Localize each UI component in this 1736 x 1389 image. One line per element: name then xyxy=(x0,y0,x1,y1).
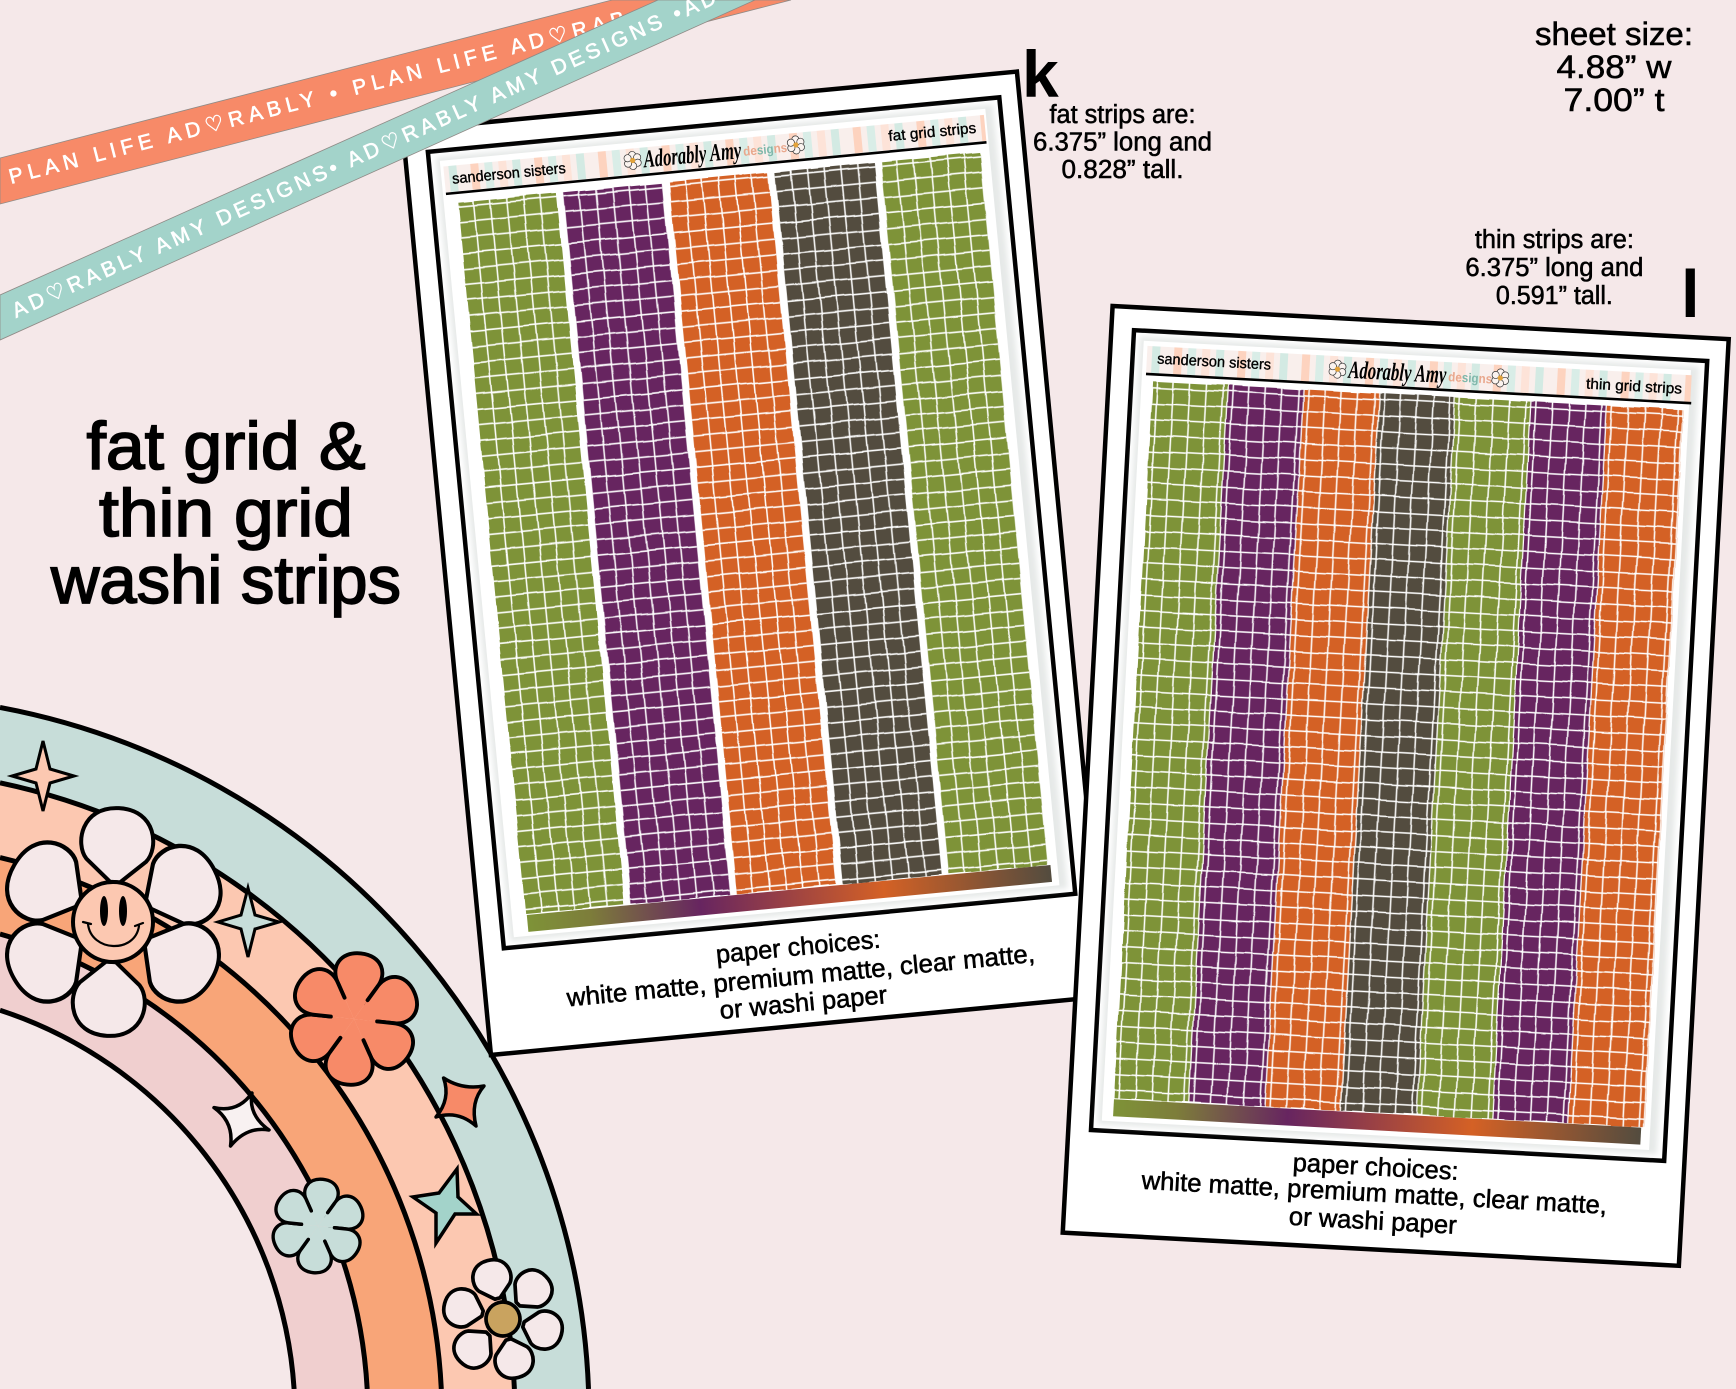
title: washi strips xyxy=(50,543,401,618)
icon: coral star xyxy=(436,1078,484,1126)
paper choices: paper choices: xyxy=(1292,1149,1459,1186)
washi tape: coral: PLAN LIFE AD♡RABLY • PLAN LIFE AD♡RAB xyxy=(6,6,633,189)
title xyxy=(50,409,401,618)
fat strip dimensions: fat strips are: xyxy=(1050,101,1196,129)
icon: teal flower xyxy=(264,1174,372,1278)
icon: daisy with gold centre xyxy=(428,1245,578,1389)
header rule xyxy=(1146,374,1691,403)
header label: sanderson sisters: sanderson sisters xyxy=(451,160,566,188)
logo: Adorably Amy xyxy=(1346,357,1448,389)
icon: teal star xyxy=(413,1169,476,1243)
title: fat grid & xyxy=(86,409,366,484)
thin strip dimensions: thin strips are: xyxy=(1475,226,1634,254)
fat strip dimensions: 0.828” tall. xyxy=(1062,156,1184,184)
paper choices: white matte, premium matte, clear matte, xyxy=(1140,1167,1608,1220)
sheet card xyxy=(1063,306,1729,1266)
panel: thin grid sheet xyxy=(1063,306,1729,1266)
sticker frame xyxy=(428,97,1075,948)
sheet size text: 7.00” t xyxy=(1564,82,1665,118)
paper choices: or washi paper xyxy=(718,981,889,1025)
sheet size text xyxy=(1535,16,1693,118)
gradient bar xyxy=(527,865,1052,932)
paper choices xyxy=(562,911,1039,1039)
letter l marker: l xyxy=(1681,257,1700,332)
letter k marker: k xyxy=(1022,37,1059,111)
logo: designs xyxy=(1448,369,1493,386)
icon: teal sparkle xyxy=(218,888,279,957)
header stripes xyxy=(1146,346,1692,402)
panel: fat grid sheet xyxy=(403,72,1105,1055)
sheet size text: 4.88” w xyxy=(1556,49,1672,85)
rainbow xyxy=(0,707,588,1389)
header label: thin grid strips: thin grid strips xyxy=(1586,376,1682,398)
paper choices xyxy=(1138,1141,1609,1248)
paper choices: or washi paper xyxy=(1288,1203,1458,1240)
fat strip dimensions xyxy=(1033,101,1212,184)
icon: white star xyxy=(214,1093,269,1146)
thin strip dimensions: 6.375” long and xyxy=(1465,254,1643,282)
header label: fat grid strips: fat grid strips xyxy=(888,120,977,145)
sticker frame xyxy=(1091,330,1707,1161)
sheet size text: sheet size: xyxy=(1535,16,1693,52)
washi strips xyxy=(458,153,1048,914)
logo: designs xyxy=(743,140,788,159)
header label: sanderson sisters: sanderson sisters xyxy=(1157,350,1272,374)
title: thin grid xyxy=(99,476,353,551)
thin strip dimensions xyxy=(1465,226,1643,310)
header rule xyxy=(446,142,986,194)
sheet card xyxy=(403,72,1105,1055)
icon: peach sparkle xyxy=(12,741,74,811)
gradient bar xyxy=(1113,1099,1641,1145)
header stripes xyxy=(443,115,986,192)
icon: smiley flower xyxy=(0,806,233,1038)
rainbow bands xyxy=(0,707,588,1389)
washi strips xyxy=(1114,381,1683,1127)
paper choices: white matte, premium matte, clear matte, xyxy=(565,940,1036,1013)
logo: Adorably Amy xyxy=(641,137,743,174)
icon: coral flower xyxy=(279,946,429,1092)
fat strip dimensions: 6.375” long and xyxy=(1033,128,1212,156)
thin strip dimensions: 0.591” tall. xyxy=(1496,282,1613,310)
paper choices: paper choices: xyxy=(715,926,882,969)
